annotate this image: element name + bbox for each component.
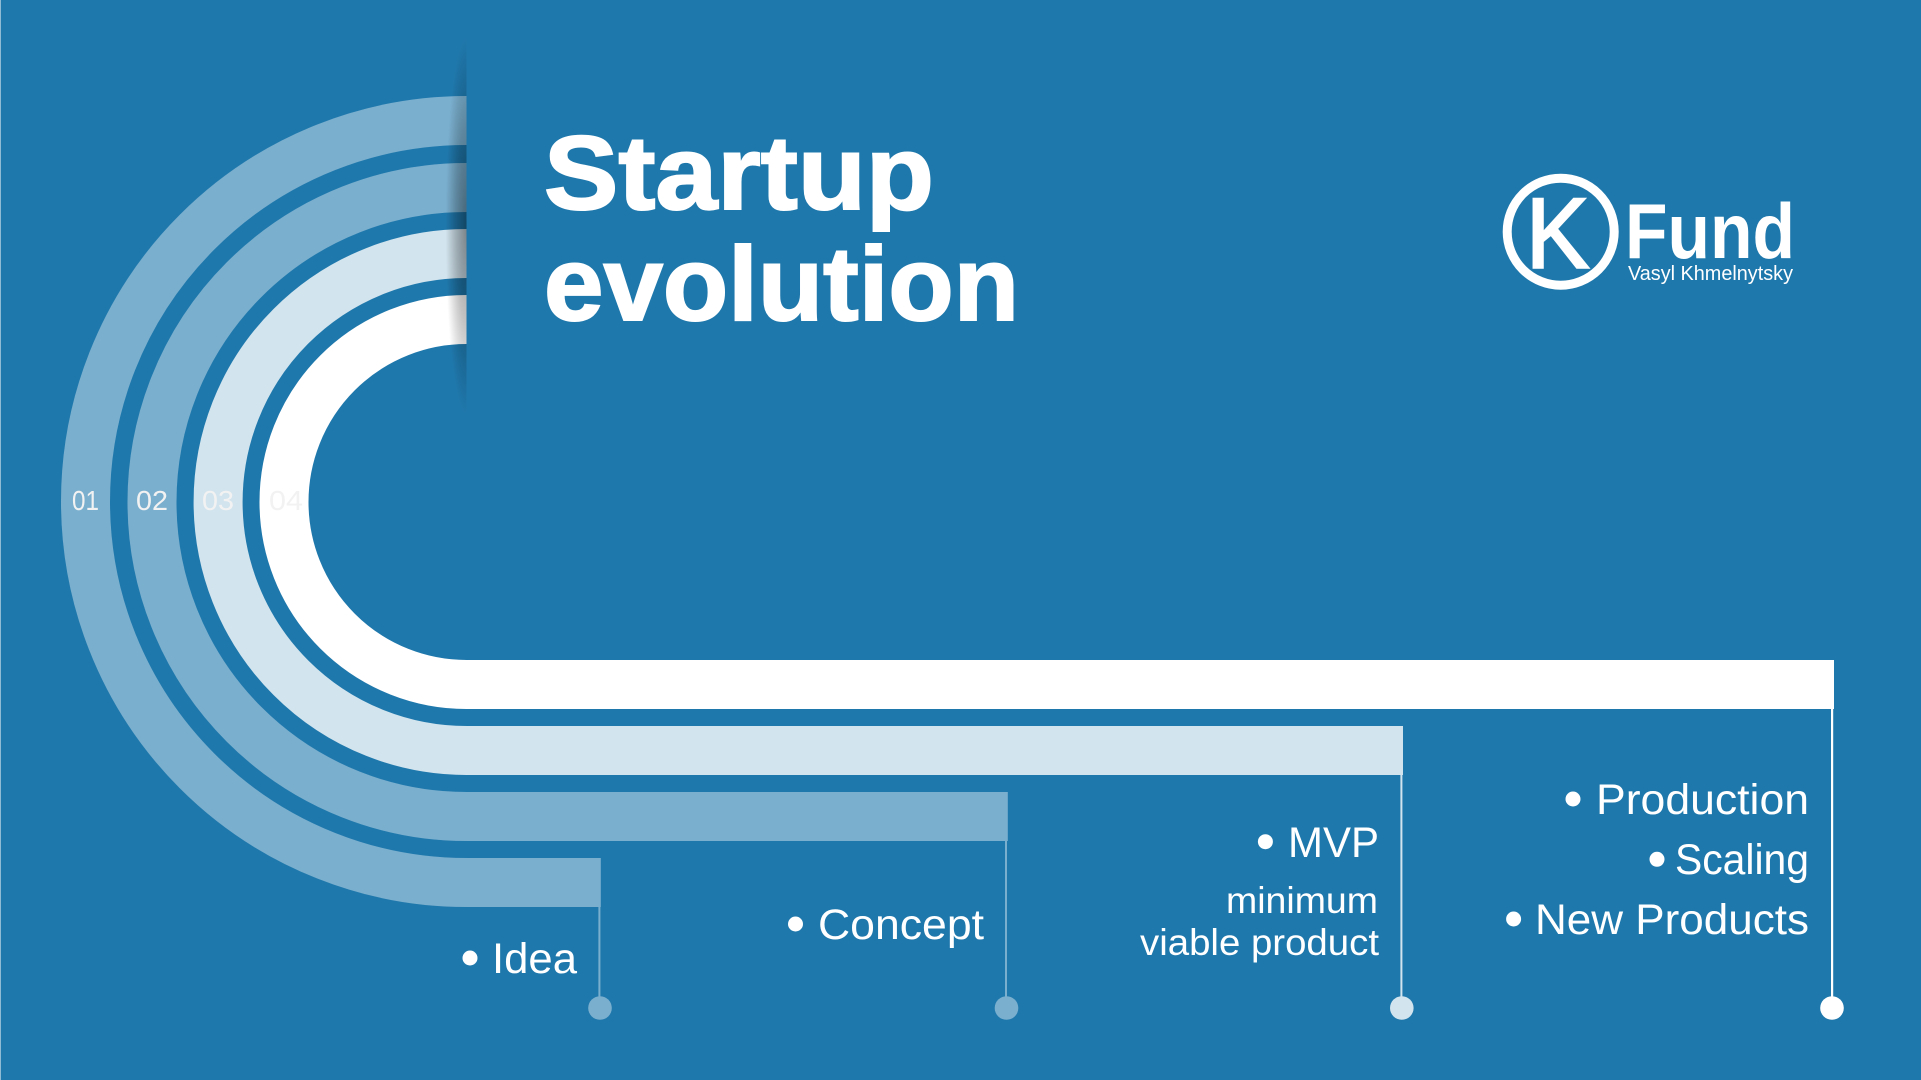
band 02: concept <box>152 188 1008 816</box>
label list: Production, Scaling, New Products: Scaling <box>1675 836 1809 884</box>
step numbers: 02 <box>136 485 168 516</box>
shadow at arc ends <box>440 30 466 425</box>
logo ring <box>1507 178 1614 285</box>
logo: K Fund <box>1507 177 1795 288</box>
label: MVP: MVP <box>1288 819 1379 867</box>
logo letter K: K <box>1526 177 1589 288</box>
label: Concept: Concept <box>818 901 984 949</box>
text: minimum viable product <box>1140 880 1380 963</box>
step numbers: 01 <box>72 485 99 516</box>
logo wordmark: Fund <box>1625 187 1795 275</box>
connector 04 <box>1820 709 1844 1020</box>
band 01: idea <box>86 120 601 882</box>
step numbers <box>72 485 303 516</box>
connector 01 <box>588 907 612 1020</box>
band 03: MVP <box>218 254 1403 750</box>
connector 03 <box>1390 775 1414 1020</box>
logo subtitle: Vasyl Khmelnytsky <box>1628 262 1794 285</box>
label: Idea: Idea <box>492 935 577 983</box>
label list: Production, Scaling, New Products: New Products <box>1535 896 1809 944</box>
title: Startup <box>544 115 934 232</box>
title <box>544 115 1019 343</box>
step numbers: 03 <box>202 485 234 516</box>
label list: Production, Scaling, New Products: Production <box>1596 776 1809 824</box>
label list: Production, Scaling, New Products <box>1506 776 1809 944</box>
band 04: scaling <box>284 320 1834 684</box>
connector 02 <box>995 841 1018 1020</box>
text: minimum viable product: viable product <box>1140 922 1380 963</box>
text: minimum viable product: minimum <box>1226 880 1378 921</box>
step numbers: 04 <box>269 485 303 516</box>
title: evolution <box>544 226 1019 343</box>
